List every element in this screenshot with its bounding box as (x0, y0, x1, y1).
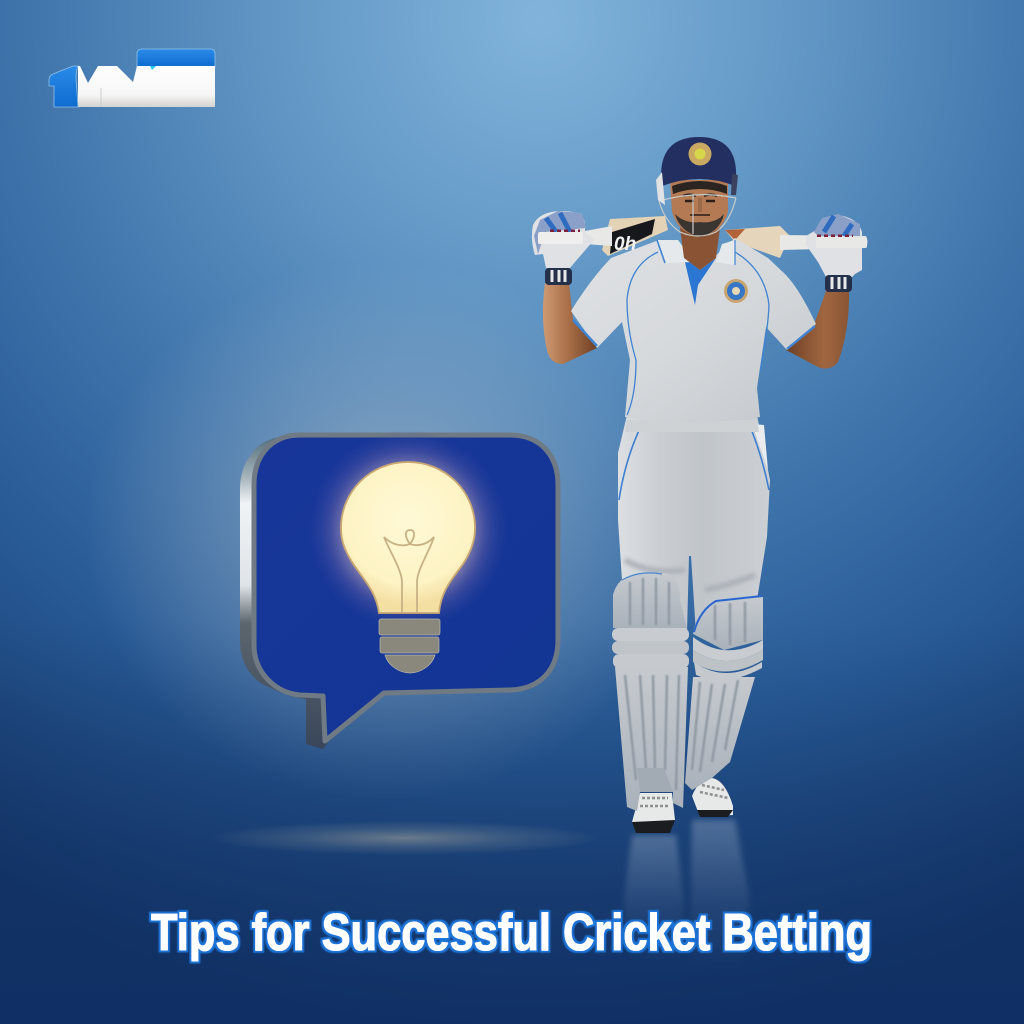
head (656, 137, 738, 270)
speech bubble with light bulb (240, 430, 558, 749)
helmet (656, 137, 738, 205)
player reflection (624, 820, 750, 970)
trousers (618, 415, 770, 634)
right arm (786, 288, 849, 369)
bubble face (254, 435, 558, 741)
title: Tips for Successful Cricket Betting (151, 904, 872, 962)
bulb glow (308, 430, 508, 630)
floor glow (210, 821, 600, 855)
left glove (532, 211, 594, 285)
right leg pad (685, 596, 763, 790)
right glove (806, 214, 867, 292)
helmet grille (659, 194, 736, 236)
shirt crest (724, 279, 748, 303)
bat (538, 216, 868, 258)
bulb filament (384, 530, 434, 612)
right shoe (692, 778, 733, 817)
left arm (543, 283, 597, 364)
bubble side extrusion (240, 434, 345, 749)
bulb base (379, 619, 440, 673)
left shoe (632, 793, 675, 833)
shirt (571, 238, 816, 422)
left leg pad (612, 573, 689, 811)
bat: 0h (614, 234, 636, 255)
cricket player (532, 137, 868, 833)
bulb glass (341, 462, 475, 613)
logo (49, 49, 215, 107)
